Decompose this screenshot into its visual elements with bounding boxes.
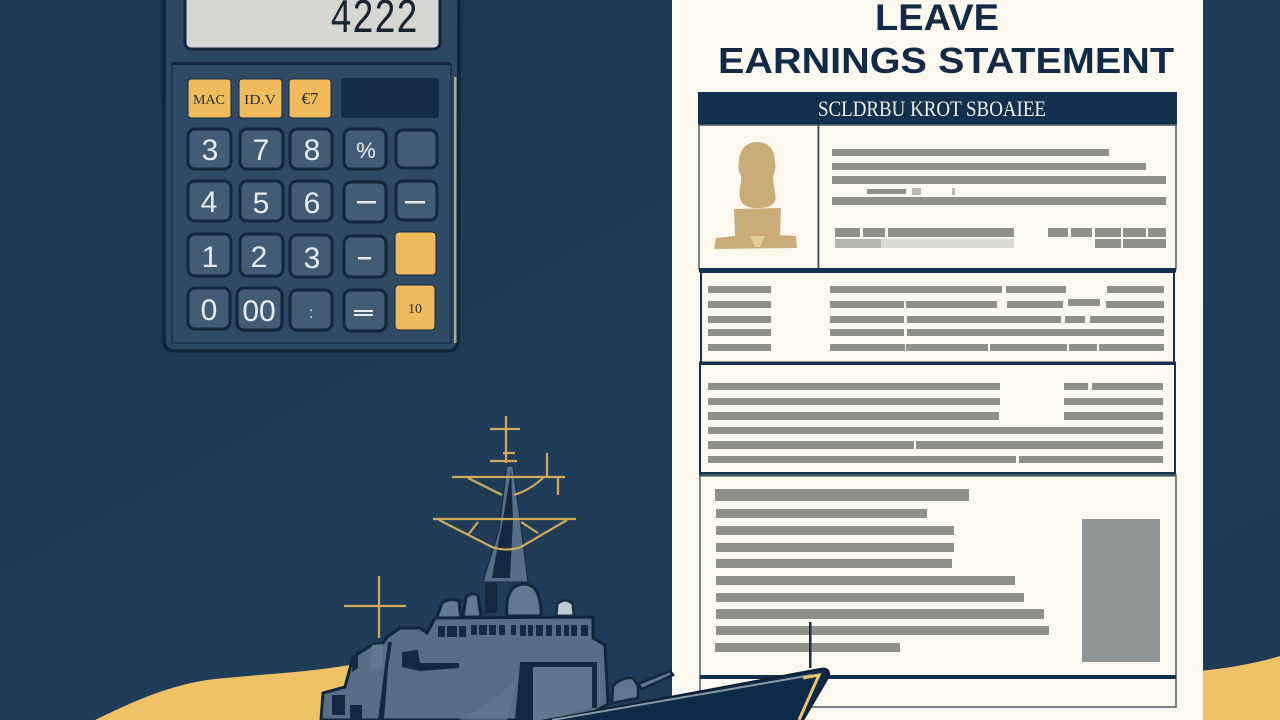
number keys: 3 <box>304 242 320 275</box>
header band: SCLDRBU KROT SBOAIEE <box>818 96 1046 121</box>
number keys: % <box>356 138 376 163</box>
number keys: 1 <box>202 241 218 274</box>
main mast rigging <box>433 416 576 613</box>
bow antenna <box>809 622 812 668</box>
deck gun <box>612 671 673 703</box>
paper sheet <box>672 0 1203 720</box>
function keys: MAC <box>193 93 225 108</box>
number keys: 6 <box>304 187 320 220</box>
calculator keypad inset <box>172 64 451 343</box>
sand wave left <box>95 665 350 720</box>
superstructure shadows <box>332 642 597 720</box>
superstructure <box>321 617 608 720</box>
superstructure light panels <box>369 644 592 720</box>
calculator <box>164 0 459 351</box>
sand wave right <box>1200 656 1280 720</box>
function keys: ID.V <box>244 93 276 108</box>
calculator body <box>164 0 459 351</box>
leave and earnings statement document <box>672 0 1203 720</box>
function keys: €7 <box>302 89 319 108</box>
yellow keys <box>395 232 436 330</box>
number keys: 0 <box>201 294 217 327</box>
number keys: 2 <box>251 241 267 274</box>
yellow keys: 10 <box>408 302 422 317</box>
number keys: 00 <box>242 295 276 328</box>
grey summary box <box>1082 519 1160 662</box>
small aft mast <box>344 576 406 638</box>
radar domes <box>436 584 574 620</box>
entitlements section <box>699 268 1176 363</box>
number keys <box>188 129 437 331</box>
remarks section <box>700 475 1176 707</box>
personal details section <box>699 125 1176 269</box>
personal detail lines <box>832 149 1166 248</box>
number keys: 7 <box>253 134 269 167</box>
number keys: : <box>309 305 313 322</box>
portrait icon <box>714 142 797 249</box>
document title: EARNINGS STATEMENT <box>718 40 1174 81</box>
warship <box>321 416 829 720</box>
number keys: 4 <box>201 186 217 219</box>
hull <box>536 669 829 720</box>
number keys: 8 <box>304 134 320 167</box>
calculator screen <box>185 0 440 49</box>
calculator keypad divider <box>172 62 451 65</box>
deductions section <box>699 362 1176 476</box>
bridge windows <box>438 625 588 637</box>
number keys: 5 <box>253 187 269 220</box>
function keys <box>188 78 439 118</box>
document title <box>718 0 1174 81</box>
number keys: 3 <box>202 134 218 167</box>
header band <box>698 92 1177 125</box>
calculator edge highlight <box>454 77 456 343</box>
